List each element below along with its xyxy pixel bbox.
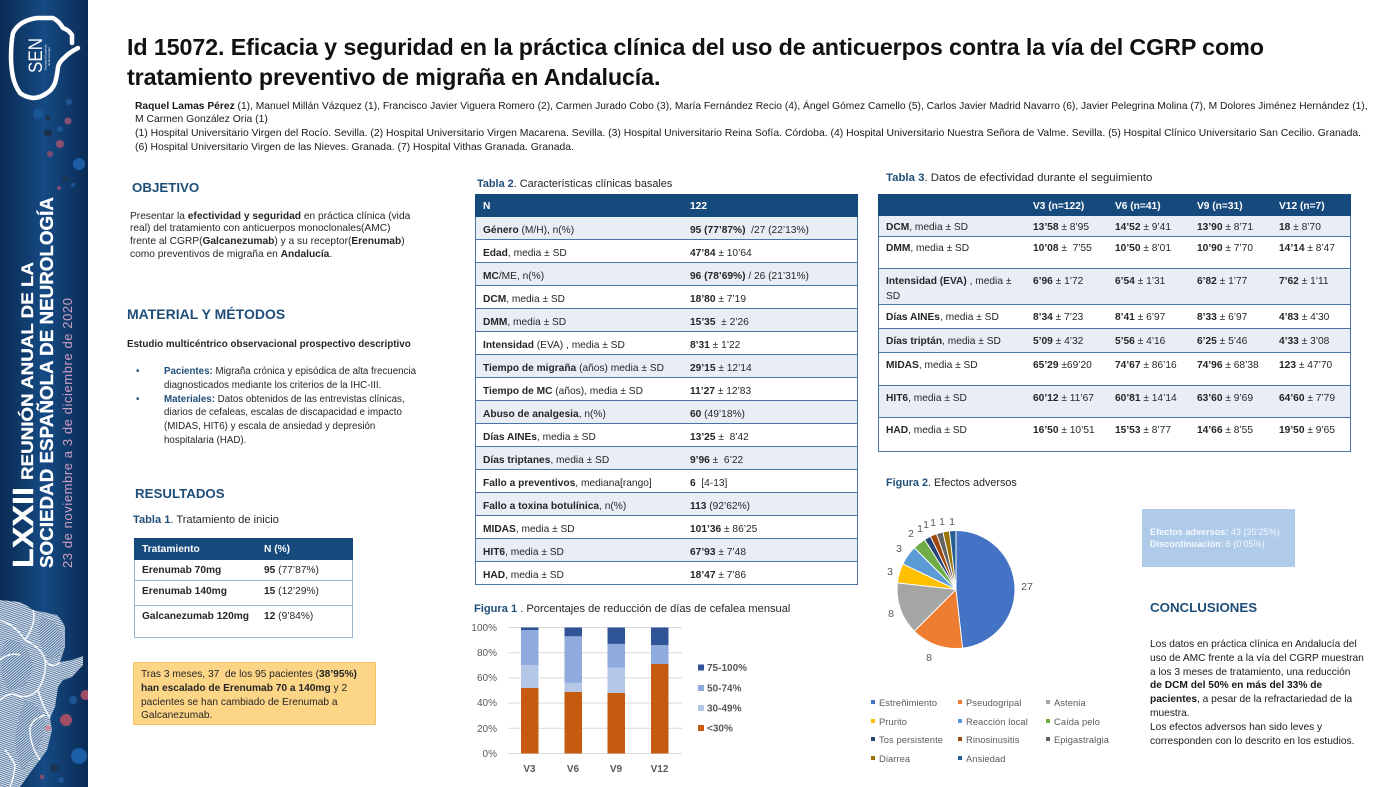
logo: SEN: de Neurología: [47, 47, 51, 66]
table 3: 4’83 ± 4’30: [1279, 312, 1329, 323]
bullet list: pacientes and materiales: hospitalaria (HAD).: [164, 435, 246, 446]
molecule dots top: [33, 99, 85, 190]
caption: tabla 1: Tabla 1. Tratamiento de inicio: [133, 514, 279, 526]
table 3: 10’90 ± 7’70: [1197, 243, 1253, 254]
logo: SEN: [11, 18, 78, 98]
table 2: 122: [690, 201, 707, 212]
table 3: 13’90 ± 8’71: [1197, 222, 1253, 233]
table 2: Fallo a toxina botulínica, n(%): [483, 501, 626, 512]
legend: figura 2: Ansiedad: [966, 754, 1006, 764]
table 2: 13’25 ± 8’42: [690, 432, 749, 443]
pie value labels: 3: [887, 566, 893, 578]
table 1: Erenumab 70mg: [142, 565, 221, 576]
bar V3: [521, 628, 538, 754]
event title rotated: SOCIEDAD ESPAÑOLA DE NEUROLOGÍA: [36, 197, 57, 568]
table 2: 9’96 ± 6’22: [690, 455, 743, 466]
heading: conclusiones: CONCLUSIONES: [1150, 600, 1257, 615]
callout: escalation note: Galcanezumab.: [141, 710, 212, 721]
caption: figura 2: Figura 2. Efectos adversos: [886, 476, 1017, 488]
table 3: 64’60 ± 7’79: [1279, 393, 1335, 404]
event title rotated: REUNIÓN ANUAL DE LA: [18, 262, 37, 480]
table 2: 113 (92’62%): [690, 501, 750, 512]
table 2: DMM, media ± SD: [483, 317, 566, 328]
table 3: 13’58 ± 8’95: [1033, 222, 1089, 233]
legend: figura 1: <30%: [707, 724, 733, 734]
legend: figura 2: Prurito: [879, 717, 907, 727]
legend: figura 2: Astenia: [1054, 698, 1086, 708]
table 3: V12 (n=7): [1279, 201, 1325, 212]
callout: adverse effects: [1142, 509, 1295, 567]
table 2: Fallo a preventivos, mediana[rango]: [483, 478, 652, 489]
table 3: MIDAS, media ± SD: [886, 360, 978, 371]
bullet list: pacientes and materiales: Pacientes: Migraña crónica y episódica de alta frecuencia: [164, 366, 416, 377]
caption: tabla 2: Tabla 2. Características clínicas basales: [477, 178, 672, 190]
table 1: Galcanezumab 120mg: [142, 611, 249, 622]
pie value labels: 3: [896, 543, 902, 555]
bullet list: pacientes and materiales: Materiales: Datos obtenidos de las entrevistas clínicas,: [164, 394, 405, 405]
text: conclusiones: a los 3 meses de tratamiento, una reducción: [1150, 667, 1350, 678]
text: conclusiones: Los efectos adversos han sido leves y: [1150, 722, 1322, 733]
table 1: Erenumab 140mg: [142, 586, 227, 597]
table 3: Días triptán, media ± SD: [886, 336, 1001, 347]
table 3: 74’67 ± 86’16: [1115, 360, 1177, 371]
table 2: MC/ME, n(%): [483, 271, 544, 282]
title: Id 15072. Eficacia y seguridad en la práctica clínica del uso de anticuerpos contra la vía del CGRP como: [127, 34, 1264, 60]
pie value labels: [887, 516, 1033, 664]
text: conclusiones: [1150, 639, 1364, 747]
table 2: DCM, media ± SD: [483, 294, 565, 305]
table 3: 60’12 ± 11’67: [1033, 393, 1094, 404]
text: objetivo: frente al CGRP(Galcanezumab) y a su receptor(Erenumab): [130, 236, 405, 247]
table 2: 6 [4-13]: [690, 478, 727, 489]
title: [127, 34, 1264, 90]
pie value labels: 8: [888, 608, 894, 620]
table 3: 6’54 ± 1’31: [1115, 276, 1165, 287]
title: tratamiento preventivo de migraña en Andalucía.: [127, 64, 660, 90]
authors and affiliations: Raquel Lamas Pérez (1), Manuel Millán Vázquez (1), Francisco Javier Viguera Romero (2), Carmen Jurado Cobo (3), María Fernández Recio (4), Ángel Gómez Camello (5), Carlos Javier Madrid Navarro (6), Javier Pelegrina Molina (7), M Dolores Jiménez Hernández (1),: [135, 100, 1368, 112]
table 3: 65’29 ±69’20: [1033, 360, 1092, 371]
table 2: 95 (77’87%) /27 (22’13%): [690, 225, 809, 236]
legend: figura 2: Estreñimiento: [879, 698, 937, 708]
authors and affiliations: [135, 100, 1368, 153]
text: objetivo: como preventivos de migraña en Andalucía.: [130, 249, 332, 260]
text: study type: Estudio multicéntrico observacional prospectivo descriptivo: [127, 339, 411, 350]
event title rotated: LXXII: [8, 487, 40, 568]
legend: figura 2: Diarrea: [879, 754, 911, 764]
stacked bar chart: figura 1: V3: [523, 764, 536, 775]
table 1: 12 (9’84%): [264, 611, 313, 622]
table 3: 16’50 ± 10’51: [1033, 425, 1095, 436]
legend: figura 2: Caída pelo: [1054, 717, 1100, 727]
stacked bar chart: figura 1: V12: [651, 764, 669, 775]
text: objetivo: real) del tratamiento con anticuerpos monoclonales(AMC): [130, 223, 390, 234]
table 3: 14’52 ± 9’41: [1115, 222, 1171, 233]
pie value labels: 27: [1021, 581, 1033, 593]
table 2: 47’84 ± 10’64: [690, 248, 752, 259]
legend: figura 2: Rinosinusitis: [966, 735, 1020, 745]
text: conclusiones: Los datos en práctica clínica en Andalucía del: [1150, 639, 1357, 650]
table 3: 15’53 ± 8’77: [1115, 425, 1171, 436]
bullet list: pacientes and materiales: diarios de cefaleas, escalas de discapacidad e impacto: [164, 407, 402, 418]
stacked bar chart: figura 1: 80%: [477, 648, 497, 659]
callout: adverse effects: Efectos adversos: 43 (35’25%): [1150, 527, 1280, 537]
bullet list: pacientes and materiales: •: [136, 394, 139, 405]
stacked bar chart: figura 1: 60%: [477, 673, 497, 684]
table 2: 96 (78’69%) / 26 (21’31%): [690, 271, 809, 282]
authors and affiliations: (6) Hospital Universitario Virgen de las Nieves. Granada. (7) Hospital Vithas Granada. Granada.: [135, 142, 574, 153]
bar V9: [608, 628, 625, 754]
legend: figura 2: Pseudogripal: [966, 698, 1021, 708]
table 2: HAD, media ± SD: [483, 570, 564, 581]
table 2: 18’80 ± 7’19: [690, 294, 746, 305]
callout: escalation note: han escalado de Erenumab 70 a 140mg y 2: [141, 683, 347, 694]
legend: figura 1: 50-74%: [707, 684, 742, 694]
caption: figura 1: Figura 1 . Porcentajes de reducción de días de cefalea mensual: [474, 602, 790, 614]
table 3: 8’34 ± 7’23: [1033, 312, 1083, 323]
table 2: Abuso de analgesia, n(%): [483, 409, 606, 420]
callout: adverse effects: Discontinuación: 6 (0’05%): [1150, 539, 1265, 549]
text: conclusiones: pacientes, a pesar de la refractariedad de la: [1150, 694, 1352, 705]
bullet list: pacientes and materiales: diagnosticados mediante los criterios de la IHC-III.: [164, 380, 381, 391]
table 3: 60’81 ± 14’14: [1115, 393, 1177, 404]
table 3: HAD, media ± SD: [886, 425, 967, 436]
text: objetivo: [130, 210, 410, 260]
table 3: 8’33 ± 6’97: [1197, 312, 1247, 323]
table 3: HIT6, media ± SD: [886, 393, 967, 404]
logo: SEN: SEN: [26, 38, 47, 73]
table 2: 29’15 ± 12’14: [690, 363, 752, 374]
table 2: 101’36 ± 86’25: [690, 524, 757, 535]
table 1: [134, 538, 353, 638]
text: conclusiones: uso de AMC frente a la vía del CGRP muestran: [1150, 653, 1364, 664]
heading: resultados: RESULTADOS: [135, 486, 225, 501]
text: conclusiones: muestra.: [1150, 708, 1190, 719]
table 3: 14’66 ± 8’55: [1197, 425, 1253, 436]
text: objetivo: Presentar la efectividad y seguridad en práctica clínica (vida: [130, 210, 410, 222]
table 2: Tiempo de migraña (años) media ± SD: [483, 363, 664, 374]
heading: objetivo: OBJETIVO: [132, 180, 199, 195]
table 3: 5’56 ± 4’16: [1115, 336, 1165, 347]
stacked bar chart: figura 1: [471, 623, 747, 775]
legend: figura 1: 75-100%: [707, 663, 747, 674]
table 2: Intensidad (EVA) , media ± SD: [483, 340, 625, 351]
table 3: DCM, media ± SD: [886, 222, 968, 233]
table 3: 19’50 ± 9’65: [1279, 425, 1335, 436]
bullet list: pacientes and materiales: •: [136, 366, 139, 377]
table 3: 123 ± 47’70: [1279, 360, 1332, 371]
callout: escalation note: pacientes se han cambiado de Erenumab a: [141, 697, 338, 708]
table 2: N: [483, 201, 490, 212]
stacked bar chart: figura 1: V6: [567, 764, 580, 775]
text: conclusiones: corresponden con lo descrito en los estudios.: [1150, 736, 1354, 747]
table 3: 6’96 ± 1’72: [1033, 276, 1083, 287]
table 3: 4’33 ± 3’08: [1279, 336, 1329, 347]
caption: tabla 3: Tabla 3. Datos de efectividad durante el seguimiento: [886, 172, 1152, 184]
stacked bar chart: figura 1: 20%: [477, 724, 497, 735]
table 2: HIT6, media ± SD: [483, 547, 564, 558]
table 3: V3 (n=122): [1033, 201, 1084, 212]
stacked bar chart: figura 1: 0%: [483, 749, 497, 760]
pie value labels: 8: [926, 652, 932, 664]
bullet list: pacientes and materiales: [136, 366, 416, 446]
table 2: 8’31 ± 1’22: [690, 340, 740, 351]
table 3: V9 (n=31): [1197, 201, 1243, 212]
table 3: 18 ± 8’70: [1279, 222, 1321, 233]
table 3: 10’50 ± 8’01: [1115, 243, 1171, 254]
authors and affiliations: M Carmen González Oria (1): [135, 114, 268, 125]
callout: escalation note: [133, 662, 376, 725]
legend: figura 1: [698, 663, 747, 734]
stacked bar chart: figura 1: V9: [610, 764, 623, 775]
table 2: Tiempo de MC (años), media ± SD: [483, 386, 643, 397]
table 3: V6 (n=41): [1115, 201, 1161, 212]
stacked bar chart: figura 1: 40%: [477, 698, 497, 709]
table 3: Intensidad (EVA) , media ±: [886, 276, 1011, 287]
table 3: 6’82 ± 1’77: [1197, 276, 1247, 287]
table 1: 15 (12’29%): [264, 586, 319, 597]
bar V6: [564, 628, 582, 754]
event title rotated: [8, 197, 75, 568]
pie chart: figura 2: [871, 516, 1110, 764]
table 3: 8’41 ± 6’97: [1115, 312, 1165, 323]
legend: figura 1: 30-49%: [707, 704, 742, 714]
pie slices: [897, 530, 997, 648]
callout: escalation note: Tras 3 meses, 37 de los 95 pacientes (38’95%): [141, 669, 357, 680]
molecule dots bottom: [40, 690, 90, 783]
legend: figura 2: Epigastralgia: [1054, 735, 1110, 745]
pie value labels: 1: [949, 516, 955, 528]
table 3: 74’96 ± 68’38: [1197, 360, 1259, 371]
table 3: 10’08 ± 7’55: [1033, 243, 1092, 254]
table 1: Tratamiento: [142, 544, 200, 555]
table 2: 67’93 ± 7’48: [690, 547, 746, 558]
bullet list: pacientes and materiales: (MIDAS, HIT6) y escala de ansiedad y depresión: [164, 421, 375, 432]
table 1: N (%): [264, 544, 290, 555]
table 3: 7’62 ± 1’11: [1279, 276, 1329, 287]
table 2: Días AINEs, media ± SD: [483, 432, 596, 443]
table 2: MIDAS, media ± SD: [483, 524, 575, 535]
legend: figura 2: Tos persistente: [879, 735, 943, 745]
table 3: 5’09 ± 4’32: [1033, 336, 1083, 347]
table 2: 60 (49’18%): [690, 409, 745, 420]
pie value labels: 1: [917, 523, 923, 535]
table 2: Género (M/H), n(%): [483, 225, 574, 236]
authors and affiliations: (1) Hospital Universitario Virgen del Rocío. Sevilla. (2) Hospital Universitario Virgen Macarena. Sevilla. (3) Hospital Universitario Reina Sofía. Córdoba. (4) Hospital Universitario Nuestra Señora de Valme. Sevilla. (5) Hospital Clínico Universitario San Cecilio. Granada.: [135, 128, 1361, 139]
pie value labels: 1: [939, 516, 945, 528]
table 1: 95 (77’87%): [264, 565, 319, 576]
table 3: 14’14 ± 8’47: [1279, 243, 1335, 254]
stacked bar chart: figura 1: 100%: [471, 623, 497, 634]
pie value labels: 2: [908, 528, 914, 540]
legend: figura 2: [871, 698, 1110, 764]
table 2: 11’27 ± 12’83: [690, 386, 751, 397]
table 3: Días AINEs, media ± SD: [886, 312, 999, 323]
table 2: 18’47 ± 7’86: [690, 570, 746, 581]
event title rotated: 23 de noviembre a 3 de diciembre de 2020: [60, 298, 75, 568]
table 3: 63’60 ± 9’69: [1197, 393, 1253, 404]
pie value labels: 1: [923, 519, 929, 531]
pie value labels: 1: [930, 517, 936, 529]
heading: material y metodos: MATERIAL Y MÉTODOS: [127, 306, 285, 322]
table 3: DMM, media ± SD: [886, 243, 969, 254]
table 2: Edad, media ± SD: [483, 248, 567, 259]
table 3: SD: [886, 291, 900, 302]
legend: figura 2: Reacción local: [966, 717, 1028, 727]
table 3: 6’25 ± 5’46: [1197, 336, 1247, 347]
table 2: [475, 194, 858, 585]
text: conclusiones: de DCM del 50% en más del 33% de: [1150, 680, 1322, 691]
table 2: 15’35 ± 2’26: [690, 317, 749, 328]
table 3: [878, 194, 1351, 452]
sidebar banner: [0, 0, 88, 787]
bar V12: [651, 628, 668, 754]
logo: SEN: Sociedad Española: [44, 44, 48, 70]
brain illustration: [0, 600, 83, 787]
table 2: Días triptanes, media ± SD: [483, 455, 609, 466]
